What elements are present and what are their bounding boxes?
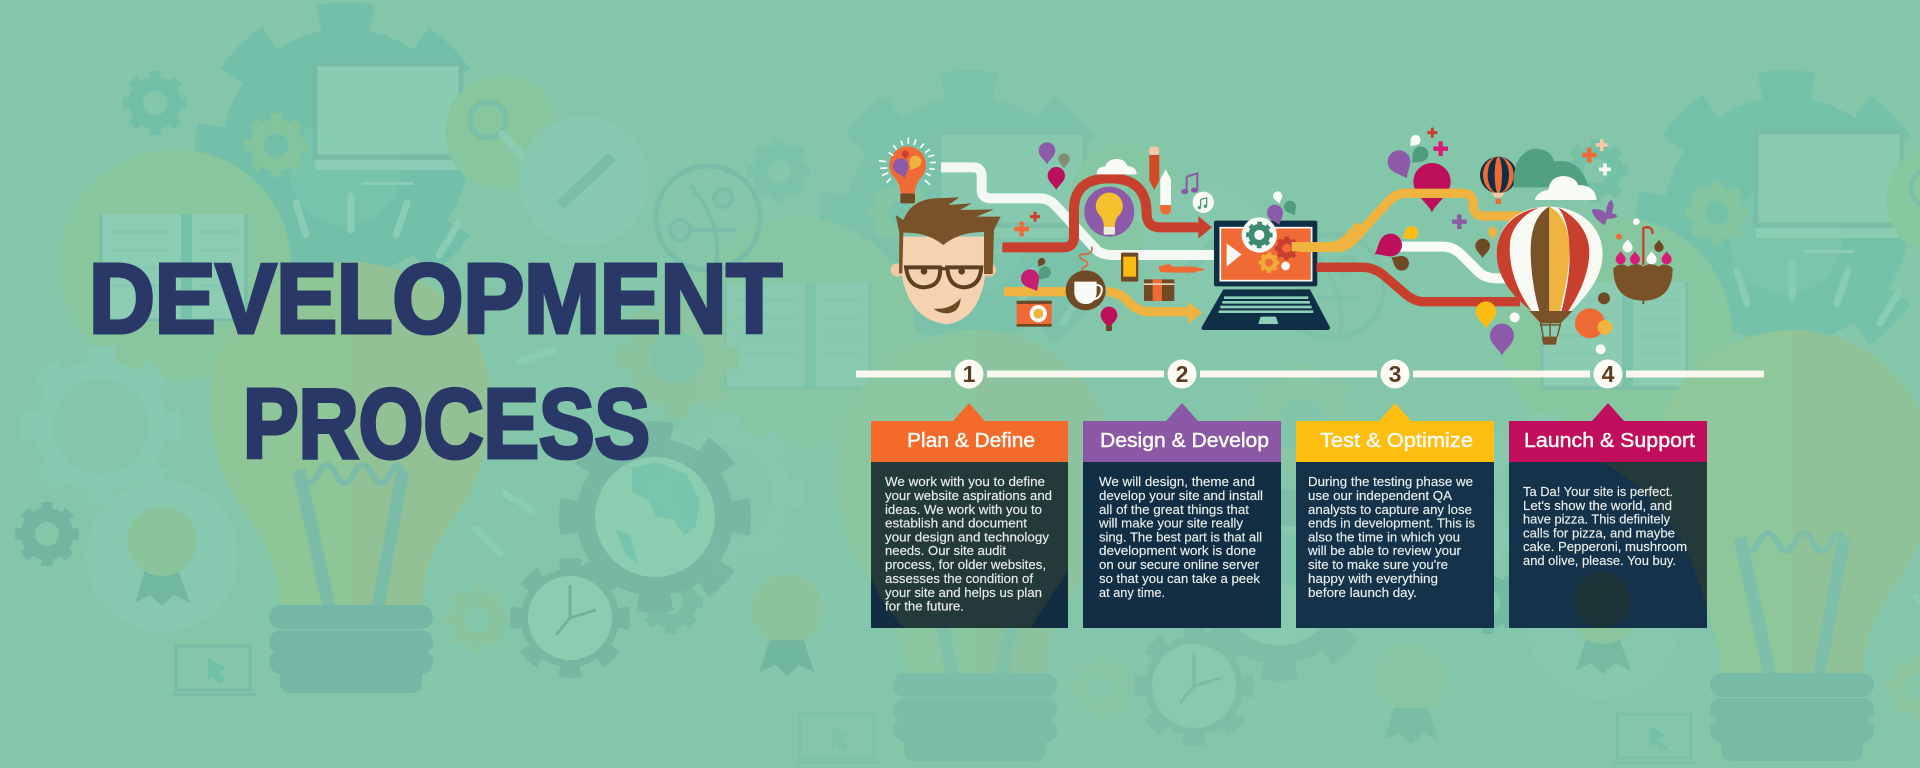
- text: Launch & Support description: calls for pizza, and maybe: [1523, 526, 1675, 540]
- red path arrow: [1002, 178, 1212, 247]
- text: Test & Optimize description: before launch day.: [1308, 585, 1417, 600]
- icon: pencils: [1149, 147, 1171, 215]
- panel: Design & Develop: [1083, 403, 1281, 628]
- text: Design & Develop description: sing. The best part is that all: [1099, 530, 1262, 544]
- panel: Plan & Define: [871, 403, 1068, 628]
- icon: camera: [1017, 301, 1052, 327]
- icon: magenta drop behind path: [1413, 163, 1451, 212]
- text: Launch & Support description: Ta Da! Your site is perfect.: [1523, 484, 1673, 499]
- text: Plan & Define description: needs. Our site audit: [885, 543, 1006, 558]
- text: Plan & Define description: your site and helps us plan: [885, 585, 1042, 600]
- icon: drops above laptop: [1265, 190, 1300, 228]
- icon: idea bulb with rays: [879, 137, 936, 203]
- icon: butterfly: [1592, 200, 1617, 225]
- illustration: left half with character, paths and laptop: [879, 137, 1360, 331]
- heading: Test & Optimize: Test & Optimize: [1320, 430, 1473, 452]
- icon: pen: [1158, 264, 1206, 273]
- step number 2: [1168, 360, 1196, 388]
- yellow path start: [1300, 222, 1370, 247]
- text: Plan & Define description: process, for older websites,: [885, 557, 1046, 572]
- text: Plan & Define description: [885, 474, 1052, 614]
- heading: Design & Develop: Design & Develop: [1100, 430, 1269, 452]
- text: Plan & Define description: your website aspirations and: [885, 488, 1052, 503]
- title: PROCESS: [243, 368, 650, 478]
- step number 1: 1: [963, 361, 976, 387]
- text: Design & Develop description: We will design, theme and: [1099, 474, 1255, 489]
- title: [89, 244, 782, 478]
- step number 3: 3: [1389, 361, 1401, 387]
- yellow path arrow: [1004, 292, 1202, 324]
- step number 3: [1380, 360, 1410, 388]
- icon: yellow bulb in purple circle: [1084, 187, 1134, 237]
- text: Plan & Define description: establish and document: [885, 516, 1027, 530]
- text: Test & Optimize description: also the time in which you: [1308, 530, 1460, 544]
- white path arrow: [941, 167, 1242, 267]
- text: Design & Develop description: on our secure online server: [1099, 557, 1260, 572]
- icon: music notes: [1181, 173, 1214, 213]
- text: Design & Develop description: development work is done: [1099, 543, 1256, 558]
- icon: drops and dots under balloon: [1476, 292, 1612, 355]
- text: Launch & Support description: [1523, 484, 1687, 568]
- icon: smartphone: [1121, 253, 1138, 282]
- text: Test & Optimize description: [1307, 474, 1475, 600]
- text: Design & Develop description: [1098, 474, 1263, 600]
- illustration: right half with balloons and paths: [1300, 128, 1673, 355]
- text: Plan & Define description: ideas. We work with you to: [885, 502, 1042, 517]
- text: Test & Optimize description: ends in development. This is: [1308, 516, 1475, 530]
- step number 4: [1594, 360, 1622, 388]
- red flow path: [1317, 267, 1520, 302]
- text: Plan & Define description: We work with you to define: [885, 474, 1045, 489]
- text: Test & Optimize description: will be able to review your: [1307, 543, 1462, 558]
- icon: floating drops top: [1039, 142, 1070, 190]
- icon: character face with glasses: [891, 197, 1001, 324]
- background collage: bulb, gears and icons, left: [14, 0, 823, 696]
- icon: coffee cup: [1066, 247, 1106, 310]
- icon: small balloon: [1480, 157, 1517, 204]
- icon: drops beside white path: [1369, 224, 1497, 273]
- timeline with numbered steps: [856, 360, 1764, 388]
- text: Design & Develop description: at any time.: [1099, 585, 1165, 600]
- text: Plan & Define description: for the future.: [885, 598, 964, 614]
- text: Test & Optimize description: use our independent QA: [1308, 488, 1452, 503]
- yellow flow path: [1367, 193, 1527, 225]
- icon: drops beside coffee: [1018, 257, 1053, 296]
- text: Design & Develop description: develop your site and install: [1099, 488, 1263, 503]
- heading: Launch & Support: Launch & Support: [1524, 430, 1695, 452]
- title: DEVELOPMENT: [89, 244, 782, 354]
- icon: plus signs right: [1582, 139, 1611, 175]
- text: Launch & Support description: Let's show the world, and: [1523, 498, 1672, 513]
- heading: Plan & Define: Plan & Define: [907, 430, 1035, 452]
- text: Design & Develop description: all of the great things that: [1099, 502, 1249, 517]
- text: Launch & Support description: have pizza. This definitely: [1523, 512, 1670, 526]
- icon: large hot air balloon: [1497, 207, 1603, 345]
- text: Plan & Define description: your design and technology: [885, 530, 1050, 544]
- text: Launch & Support description: cake. Pepperoni, mushroom: [1523, 539, 1687, 554]
- icon: laptop with gears: [1201, 217, 1330, 330]
- text: Test & Optimize description: analysts to capture any lose: [1308, 502, 1472, 517]
- background collage: middle copy: [638, 61, 1447, 764]
- icon: cloud: [1097, 159, 1137, 174]
- text: Launch & Support description: and olive, please. You buy.: [1523, 553, 1676, 568]
- connector stubs leaving laptop: [1292, 225, 1360, 267]
- text: Design & Develop description: will make your site really: [1098, 516, 1244, 530]
- icon: magenta bulb: [1101, 307, 1117, 331]
- white flow path: [1397, 247, 1510, 278]
- step number 1: [954, 360, 984, 388]
- text: Plan & Define description: assesses the condition of: [885, 571, 1033, 586]
- background collage: right copy: [1455, 61, 1920, 764]
- icon: clouds: [1513, 149, 1597, 200]
- panel: Test & Optimize: [1296, 403, 1494, 628]
- icon: plus signs: [1014, 212, 1040, 236]
- icon: gift box: [1144, 279, 1174, 301]
- text: Test & Optimize description: site to make sure you're: [1308, 557, 1448, 572]
- step number 2: 2: [1176, 361, 1188, 387]
- icon: umbrella bowl with drops: [1613, 218, 1673, 304]
- panel: Launch & Support: [1509, 403, 1707, 628]
- text: Design & Develop description: so that you can take a peek: [1099, 571, 1261, 586]
- text: Test & Optimize description: During the testing phase we: [1308, 474, 1473, 489]
- text: Test & Optimize description: happy with everything: [1308, 571, 1438, 586]
- icon: drops and pluses top: [1384, 128, 1467, 229]
- step number 4: 4: [1602, 361, 1615, 387]
